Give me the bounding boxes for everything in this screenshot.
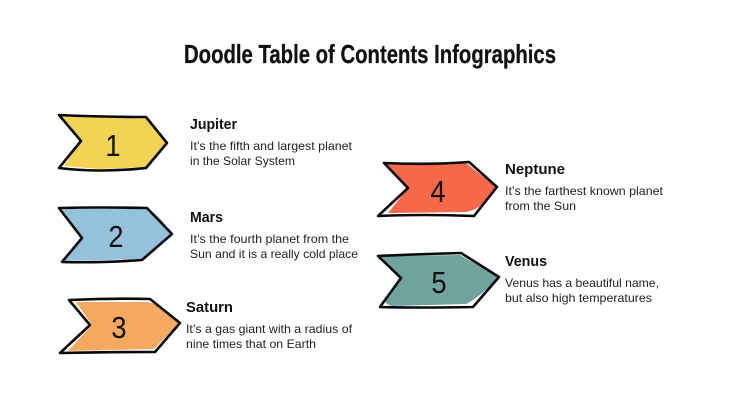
text: Mars: Mars xyxy=(190,209,223,226)
arrow 4: 4 xyxy=(430,175,446,209)
text: Saturn: Saturn xyxy=(186,299,233,316)
panel: Saturn xyxy=(60,299,353,353)
panel: Neptune xyxy=(378,161,664,216)
text: Jupiter xyxy=(190,116,353,168)
text: Mars: It’s the fourth planet from the xyxy=(190,232,349,246)
text: Neptune: from the Sun xyxy=(505,199,576,213)
panel: Mars xyxy=(59,208,358,262)
arrow 5 xyxy=(378,253,499,308)
arrow 5: 5 xyxy=(431,266,447,300)
arrow 1 xyxy=(59,115,167,170)
text: Jupiter: in the Solar System xyxy=(190,154,295,168)
arrow 3: 3 xyxy=(111,311,127,345)
text: Jupiter: Jupiter xyxy=(190,116,237,133)
panel: Venus xyxy=(378,253,659,308)
text: Venus: Venus xyxy=(505,253,547,270)
arrow 3 xyxy=(60,299,180,353)
text: Neptune: It’s the farthest known planet xyxy=(505,184,664,198)
text: Mars: Sun and it is a really cold place xyxy=(190,247,358,261)
arrow 2: 2 xyxy=(108,220,124,254)
text: Neptune xyxy=(505,161,664,213)
panel: Jupiter xyxy=(59,115,353,170)
text: Venus: Venus has a beautiful name, xyxy=(505,276,659,290)
text: Venus: but also high temperatures xyxy=(505,291,652,305)
arrow 1: 1 xyxy=(105,129,121,163)
arrow 4 xyxy=(378,162,497,216)
arrow 2 xyxy=(59,208,172,262)
text: Saturn xyxy=(186,299,353,351)
text: Saturn: nine times that on Earth xyxy=(186,337,316,351)
text: Mars xyxy=(190,209,358,261)
text: Jupiter: It’s the fifth and largest planet xyxy=(190,139,353,153)
text: Neptune: Neptune xyxy=(505,161,565,178)
text: Venus xyxy=(505,253,659,305)
text: Saturn: It’s a gas giant with a radius of xyxy=(186,322,353,336)
title: Doodle Table of Contents Infographics xyxy=(184,39,556,69)
